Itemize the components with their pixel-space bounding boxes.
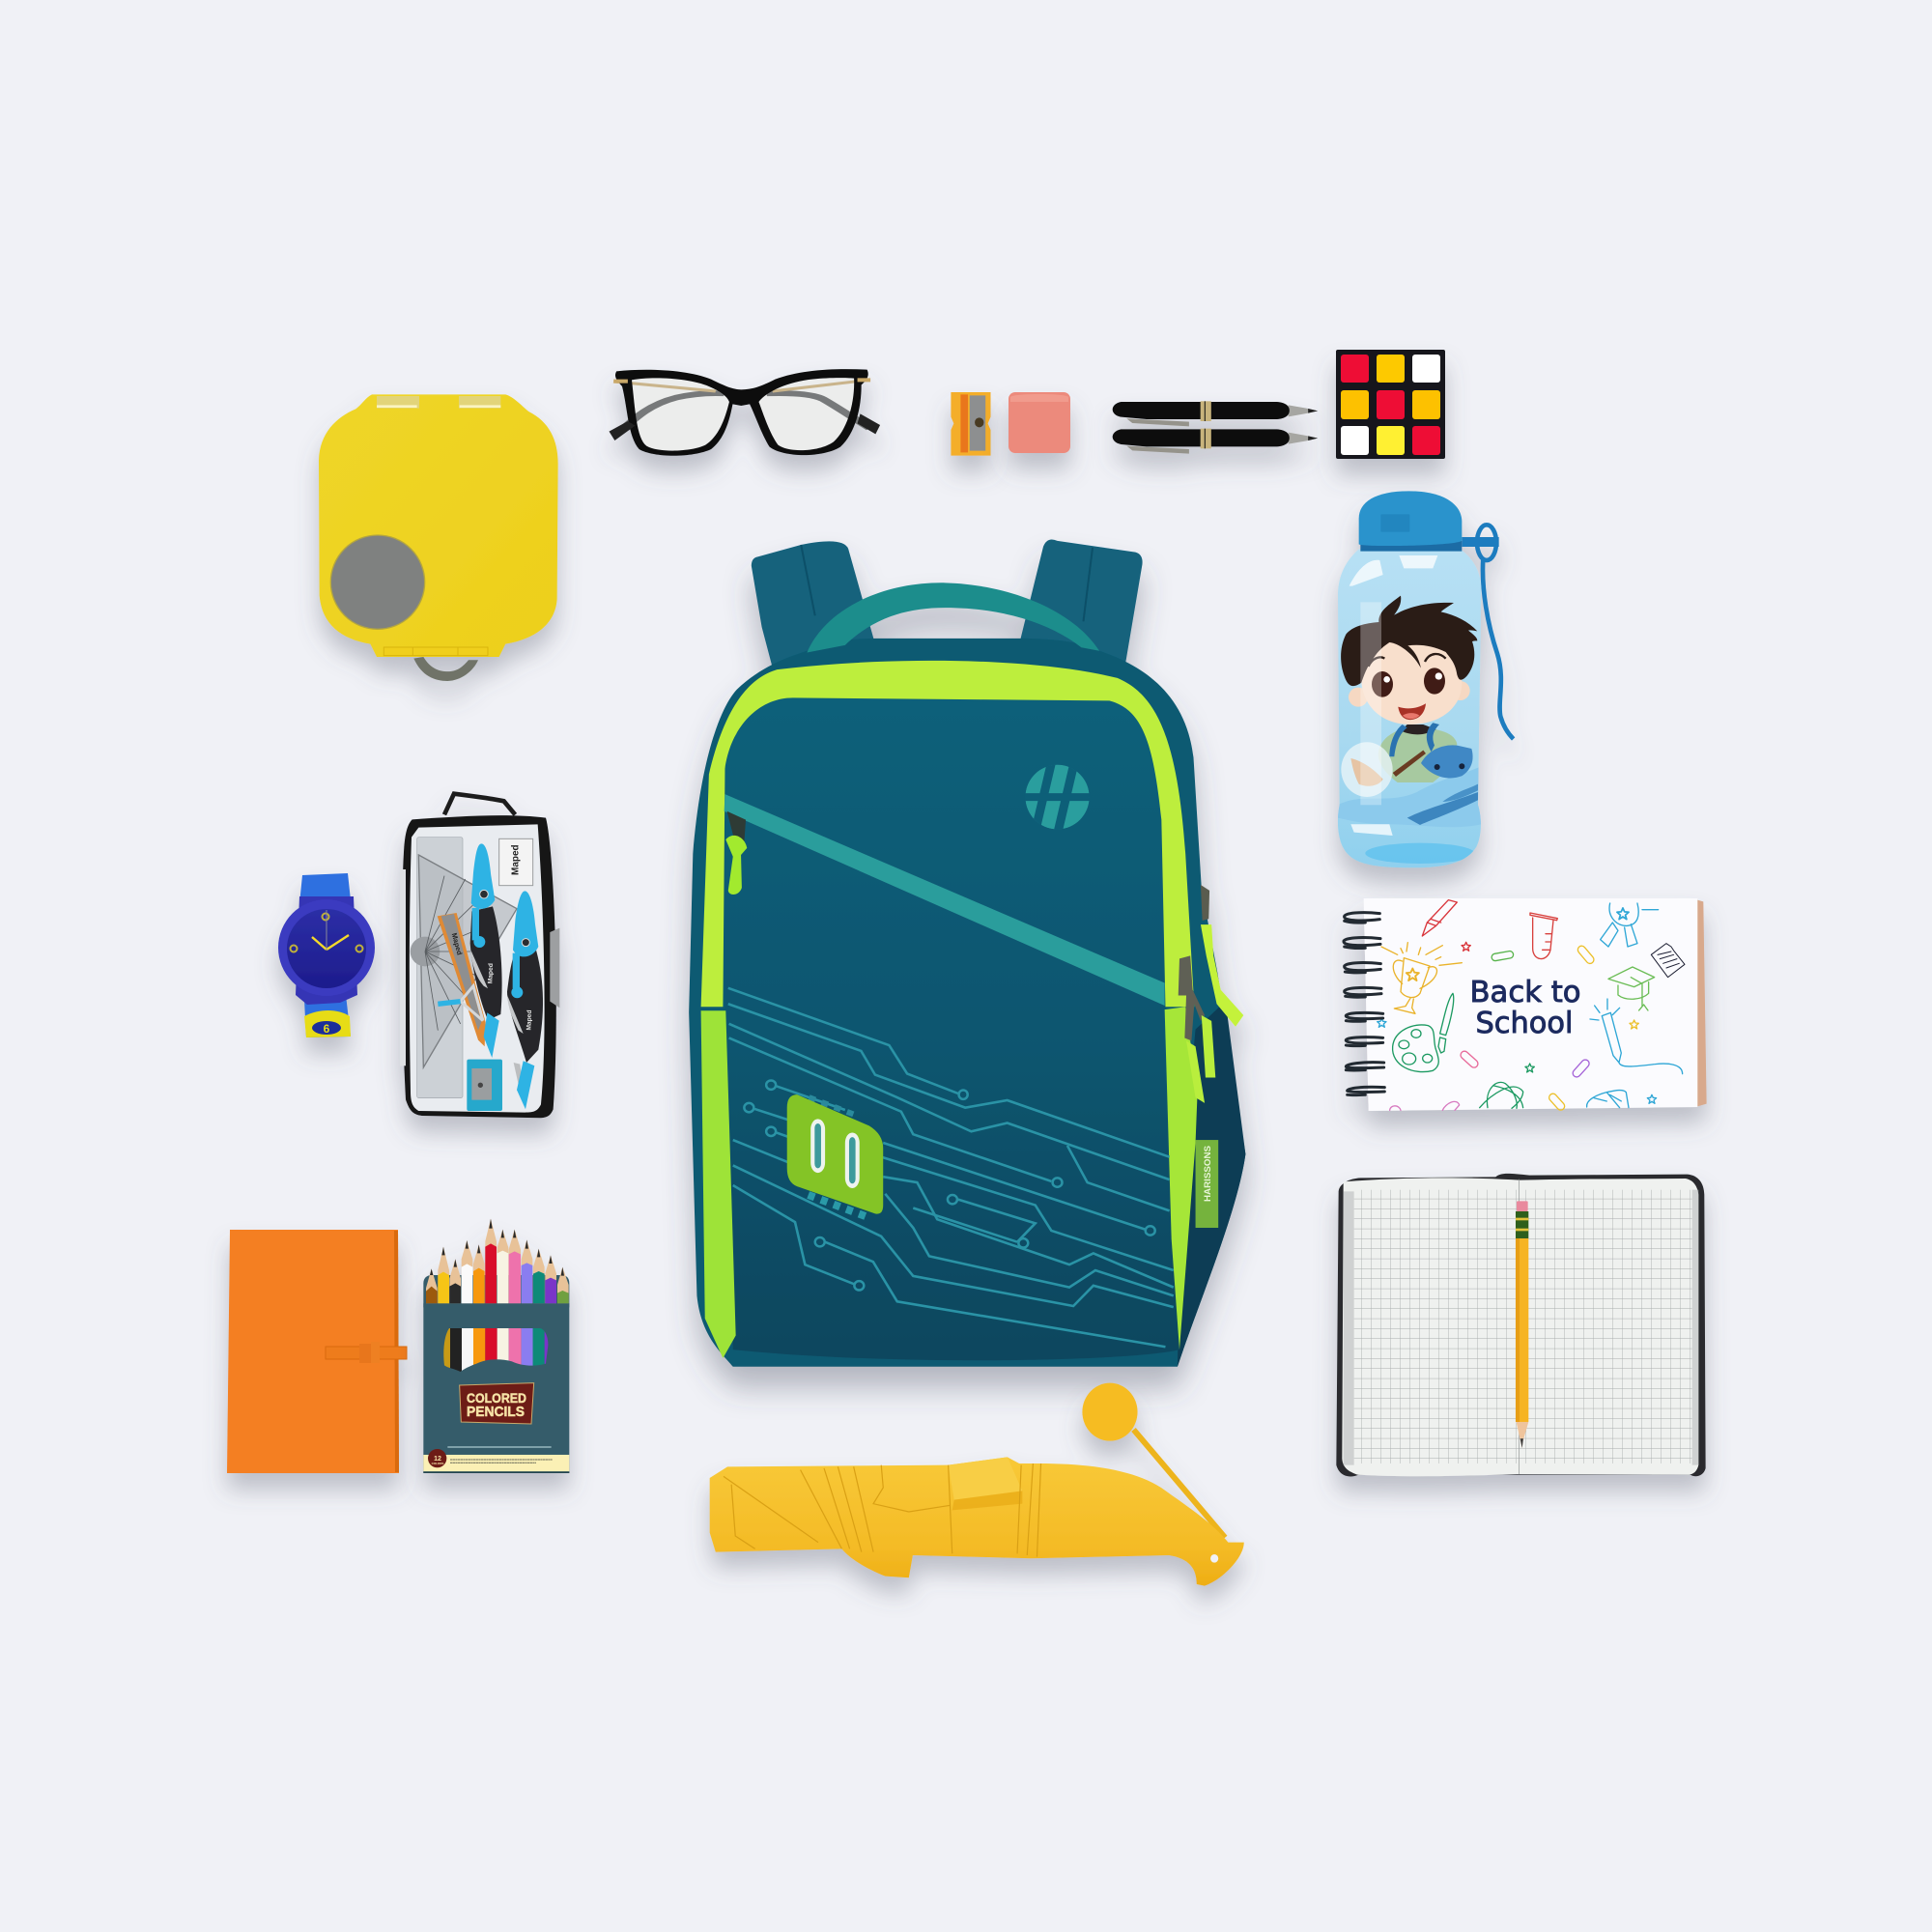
spiral binding xyxy=(1344,913,1384,1095)
bubble creature xyxy=(1341,742,1393,797)
character hair xyxy=(1341,596,1477,686)
character face xyxy=(1361,635,1462,724)
doodle: red pencil xyxy=(1422,900,1457,936)
lower latch xyxy=(384,647,488,656)
pens xyxy=(1113,401,1318,454)
character mouth xyxy=(1398,703,1426,720)
doodle: test tube xyxy=(1530,913,1557,959)
case side strip xyxy=(400,869,406,1065)
sketchbook edge xyxy=(1695,899,1707,1107)
umbrella folds xyxy=(724,1463,1041,1557)
pen bottom xyxy=(1113,429,1318,454)
temple tips xyxy=(610,413,880,440)
glasses xyxy=(610,369,880,456)
folder strap xyxy=(326,1342,407,1363)
doodle: clipped pink and blue xyxy=(1390,1101,1460,1110)
watch case xyxy=(278,899,375,996)
character brows xyxy=(1369,654,1446,667)
bottle artwork xyxy=(1338,555,1481,864)
right dark pocket xyxy=(1178,1001,1245,1367)
glasses temples xyxy=(613,380,869,430)
water bottle xyxy=(1338,491,1514,867)
small pencil xyxy=(438,913,486,1046)
geometry set xyxy=(400,794,559,1118)
folded umbrella xyxy=(710,1383,1244,1586)
count text xyxy=(432,1456,443,1465)
circuit nodes xyxy=(744,1080,1155,1291)
divider tool xyxy=(438,986,483,1021)
doodle: brush xyxy=(1438,993,1454,1053)
backpack xyxy=(689,539,1245,1367)
reflection strip xyxy=(1360,602,1381,805)
compass one xyxy=(470,843,502,1058)
box back flap xyxy=(423,1275,569,1307)
water waves xyxy=(1338,766,1481,827)
brand tag text: HARISSONS xyxy=(1203,1146,1212,1202)
frame hinges xyxy=(613,378,870,384)
compass two: Maped xyxy=(526,1009,533,1031)
small pencil: Maped xyxy=(450,932,464,956)
sketchbook xyxy=(1344,898,1707,1112)
doodle: stars xyxy=(1462,942,1470,951)
chip patch xyxy=(787,1094,883,1217)
box label text: COLORED xyxy=(467,1390,526,1406)
lunch box xyxy=(319,394,558,681)
watch upper strap xyxy=(299,873,351,904)
flat lay scene xyxy=(216,350,1718,1609)
count text: 12 xyxy=(434,1456,441,1463)
doodle: ribbon xyxy=(1601,903,1659,947)
bottle cap xyxy=(1359,491,1462,546)
umbrella velcro xyxy=(949,1457,1022,1500)
character ears xyxy=(1349,688,1368,707)
doodle: atom xyxy=(1480,1082,1523,1108)
case shell xyxy=(402,815,556,1118)
puzzle cube xyxy=(1336,350,1445,459)
tray xyxy=(410,824,545,1113)
sketchbook title: Back to xyxy=(1470,976,1580,1009)
colored pencils box xyxy=(423,1219,569,1473)
wrist watch xyxy=(278,873,375,1037)
doodles xyxy=(1378,900,1685,1112)
lunch box shell xyxy=(319,394,558,657)
grid notebook xyxy=(1336,1174,1706,1476)
circuit print xyxy=(728,988,1174,1347)
diagonal zipper xyxy=(724,794,1165,1006)
compass two xyxy=(507,891,543,1109)
box label text xyxy=(467,1390,526,1420)
mini sharpener xyxy=(467,1060,502,1111)
bottle highlights xyxy=(1350,555,1437,586)
lime right lower strip xyxy=(1165,1007,1198,1350)
watch hands xyxy=(312,935,349,950)
doodle: grad cap xyxy=(1608,967,1655,1010)
set square xyxy=(418,855,517,1067)
umbrella tip hole xyxy=(1210,1554,1218,1563)
doodle: trophy xyxy=(1381,943,1462,1013)
grey round seal xyxy=(330,535,425,629)
protractor marks xyxy=(411,876,488,1031)
pencil tip xyxy=(1517,1422,1528,1448)
dolphin xyxy=(1421,745,1473,778)
umbrella disc xyxy=(1082,1383,1138,1441)
doodle: trophy star xyxy=(1406,968,1419,980)
brand tag xyxy=(1196,1140,1218,1228)
backpack handle xyxy=(807,582,1099,652)
watch lower strap xyxy=(304,995,351,1037)
pencil eraser xyxy=(1517,1201,1528,1211)
strap number badge: 6 xyxy=(324,1022,330,1036)
case clasp xyxy=(550,928,559,1008)
watch face xyxy=(287,909,366,988)
pencils xyxy=(426,1219,569,1303)
notebook pages xyxy=(1342,1178,1698,1476)
doodle: palette xyxy=(1393,1025,1438,1072)
notebook cover xyxy=(1336,1174,1706,1476)
pen top xyxy=(1113,401,1318,426)
character eyes xyxy=(1372,668,1445,697)
sketchbook title: School xyxy=(1476,1007,1573,1040)
front panel xyxy=(724,697,1179,1360)
doodle: clips xyxy=(1459,945,1596,1112)
umbrella cord xyxy=(1133,1430,1225,1538)
glasses lenses xyxy=(632,378,854,451)
page edge shading xyxy=(1344,1190,1698,1465)
strap yellow tip xyxy=(304,1010,351,1037)
right zipper pulls xyxy=(1179,885,1243,1103)
maped tag xyxy=(499,838,533,886)
umbrella body xyxy=(710,1457,1244,1586)
sketchbook page xyxy=(1364,898,1697,1111)
box window xyxy=(443,1328,549,1372)
backpack straps xyxy=(752,539,1143,669)
lunch box strap xyxy=(413,657,478,681)
hour markers xyxy=(290,914,363,952)
cap tab xyxy=(1380,514,1409,532)
character torso xyxy=(1378,727,1457,782)
count badge xyxy=(428,1449,446,1467)
ruler xyxy=(417,838,463,1098)
sketchbook title xyxy=(1470,976,1580,1040)
bottle neck xyxy=(1360,541,1462,552)
strap number badge xyxy=(312,1021,341,1036)
doodle: book xyxy=(1587,1091,1629,1108)
box front xyxy=(423,1303,569,1473)
compass one: Maped xyxy=(487,963,495,983)
pencil ferrule xyxy=(1516,1211,1528,1238)
doodle: ribbon star xyxy=(1617,908,1629,920)
pencil barrel xyxy=(1516,1238,1528,1422)
maped tag: Maped xyxy=(511,844,522,875)
lime piping xyxy=(701,661,1194,1007)
info band xyxy=(423,1455,569,1471)
doodle: blue pencil xyxy=(1590,999,1683,1074)
info rule xyxy=(447,1445,552,1448)
glasses frame xyxy=(615,369,868,456)
left zipper pull xyxy=(725,811,747,895)
doodle: paper sheet xyxy=(1651,944,1685,978)
pencil sharpener xyxy=(951,392,991,456)
box label text: PENCILS xyxy=(467,1404,525,1420)
eraser xyxy=(1009,392,1070,453)
backpack side body xyxy=(689,639,1245,1367)
lid highlight tabs xyxy=(377,396,500,409)
backpack straps xyxy=(1389,723,1439,756)
yellow pencil xyxy=(1516,1201,1528,1448)
folder cover xyxy=(227,1230,399,1473)
bottle tether xyxy=(1462,525,1514,739)
lime left lower strip xyxy=(701,1010,736,1358)
notebook grid xyxy=(1354,1190,1692,1463)
orange folder xyxy=(227,1230,407,1473)
doodle: palette wells xyxy=(1399,1030,1433,1065)
velcro shadow xyxy=(952,1491,1022,1510)
box label xyxy=(460,1383,534,1424)
bottle body xyxy=(1338,549,1481,867)
case handle xyxy=(444,794,515,814)
count text: COLORS xyxy=(432,1462,443,1465)
notebook spine line xyxy=(1519,1179,1520,1474)
watch lugs xyxy=(296,896,357,1005)
logo xyxy=(1026,765,1090,829)
